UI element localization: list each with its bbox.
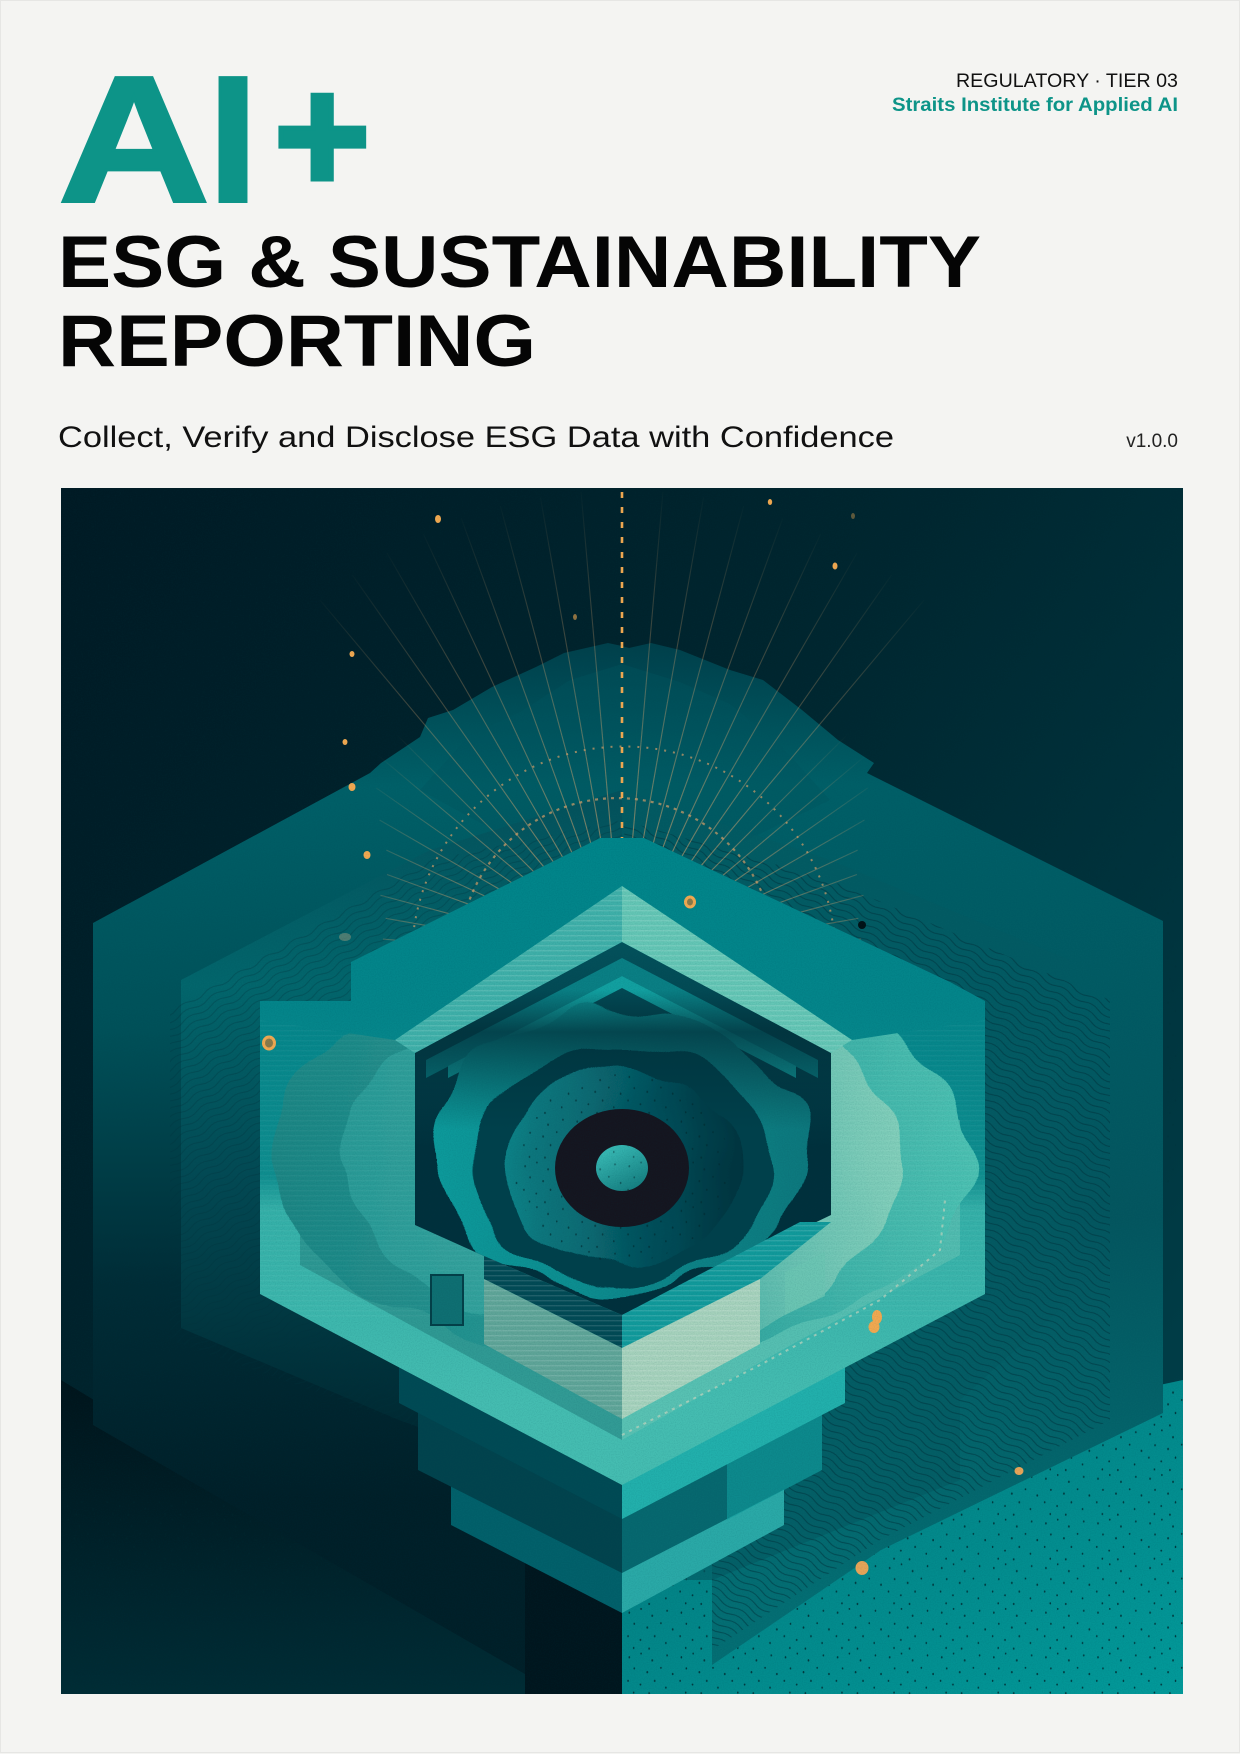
dashed arcs bbox=[413, 746, 835, 940]
outer hexagon with lumpy crown bbox=[93, 643, 1163, 1730]
logo: AI+: A bbox=[58, 40, 210, 240]
film grain bbox=[260, 492, 1183, 1694]
title: REPORTING bbox=[58, 301, 536, 382]
inner hexagon well bbox=[415, 942, 831, 1315]
cube faces bbox=[431, 1222, 831, 1419]
header meta: tier and institute bbox=[892, 71, 1178, 116]
subtitle: Collect, Verify and Disclose ESG Data with Confidence bbox=[58, 421, 894, 454]
scalloped outer rings bbox=[260, 965, 985, 1355]
dark speck bbox=[858, 921, 866, 929]
central pupil and sphere bbox=[555, 1109, 689, 1227]
logo: AI+: + bbox=[274, 43, 370, 227]
central dashed beam bbox=[621, 492, 623, 845]
circuit trace bbox=[622, 1200, 945, 1435]
orange dots bbox=[339, 499, 1024, 1575]
title bbox=[58, 222, 981, 382]
main hexagon bbox=[260, 838, 985, 1485]
illustration: isometric hexagon core bbox=[61, 488, 1183, 1730]
version: v1.0.0 bbox=[1126, 431, 1178, 452]
logo: AI+: I bbox=[208, 40, 258, 240]
header meta: tier and institute: REGULATORY · TIER 03 bbox=[956, 71, 1178, 92]
radiating rays bbox=[320, 492, 924, 951]
concentric organic rings bbox=[415, 990, 831, 1290]
header meta: tier and institute: Straits Institute for Applied AI bbox=[892, 95, 1178, 116]
orange ring markers bbox=[264, 897, 694, 1049]
second hexagon layer bbox=[170, 790, 1110, 1650]
bevelled frame bbox=[395, 886, 852, 1053]
title: ESG & SUSTAINABILITY bbox=[58, 222, 981, 303]
lower tiers bbox=[399, 1368, 845, 1613]
logo: AI+ bbox=[58, 40, 370, 240]
dark centre column bbox=[525, 1564, 622, 1694]
